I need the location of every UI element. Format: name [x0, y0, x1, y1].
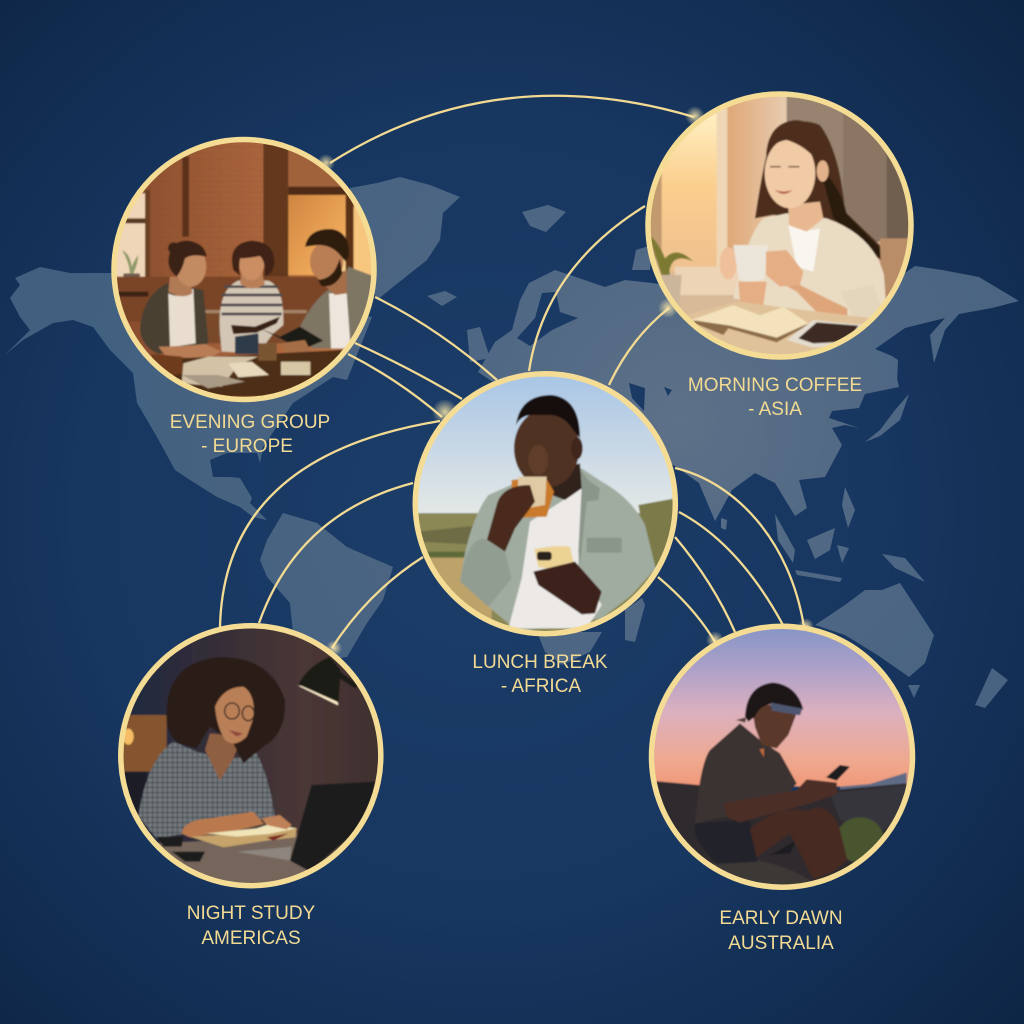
photo: Lunch Break - Africa	[405, 365, 685, 645]
label: Lunch Break - Africa: - AFRICA	[501, 676, 581, 697]
cardigan	[733, 213, 887, 324]
jacket	[460, 468, 656, 632]
legs and arm	[750, 808, 847, 879]
label: Early Dawn Australia: AUSTRALIA	[728, 933, 834, 954]
laptop	[237, 847, 292, 861]
woman left	[140, 283, 208, 354]
world map	[5, 177, 1019, 708]
connection glows	[317, 106, 814, 656]
continent: Australia	[815, 583, 934, 677]
photo: Evening Group - Europe	[105, 130, 385, 410]
continent: Eurasia	[478, 266, 1019, 521]
woman center	[220, 281, 283, 353]
label: Early Dawn Australia: EARLY DAWN	[719, 908, 843, 929]
table book tablet	[688, 302, 869, 354]
continent: South America	[260, 513, 393, 660]
continent: Africa tip	[537, 632, 602, 665]
label: Evening Group - Europe: - EUROPE	[201, 436, 293, 457]
label: Morning Coffee - Asia: MORNING COFFEE	[688, 375, 862, 396]
label: Night Study Americas: NIGHT STUDY	[187, 903, 316, 924]
torso	[695, 723, 797, 823]
label: Lunch Break - Africa: LUNCH BREAK	[472, 652, 608, 673]
shirt	[138, 742, 275, 838]
continent: Greenland	[350, 177, 460, 300]
islands	[522, 205, 566, 232]
hand, sandwich	[512, 477, 554, 518]
hands and book	[182, 812, 264, 837]
man right	[300, 267, 375, 348]
connector arcs	[220, 96, 804, 648]
continent: North America	[5, 267, 372, 520]
desk	[158, 833, 348, 883]
label: Night Study Americas: AMERICAS	[201, 928, 301, 949]
lamp	[298, 657, 341, 705]
phone and hand	[534, 546, 574, 570]
head	[753, 705, 796, 748]
photo: Morning Coffee - Asia	[640, 85, 920, 365]
phone	[172, 852, 205, 862]
table	[172, 350, 342, 397]
hair	[166, 657, 285, 763]
label: Evening Group - Europe: EVENING GROUP	[170, 412, 330, 433]
hair back	[755, 121, 881, 260]
neck and head	[548, 463, 582, 500]
photo: Night Study - Americas	[110, 620, 390, 900]
photo: Early Dawn - Australia	[640, 620, 920, 900]
arms, cup, hands	[738, 282, 767, 305]
label: Morning Coffee - Asia: - ASIA	[748, 399, 802, 420]
